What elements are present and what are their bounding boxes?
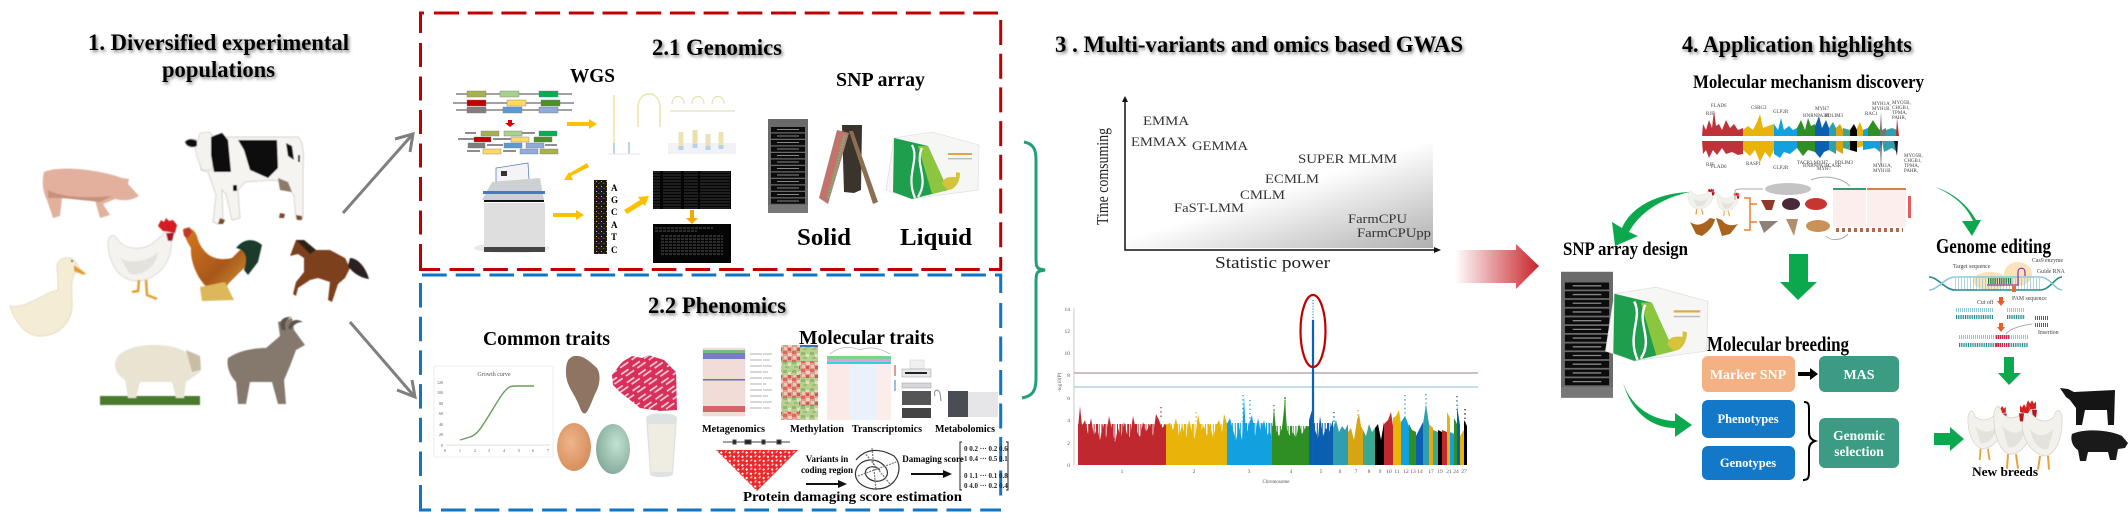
chart: growth curve: 80 [439,401,443,406]
gene model track [723,440,790,444]
matrix: damaging scores: 0 1.1 ··· 0.1 0.8 [964,472,1008,480]
axis title: Chromosome [1263,480,1290,485]
image strip: base calling: G [611,195,618,205]
icon: chicken breast [566,356,600,413]
icon: solid SNP chip rack [768,119,808,213]
box: genotypes: Genotypes [1720,456,1776,470]
label: variants in coding region [801,454,853,488]
method labels: FarmCPU [1348,211,1408,226]
heatmap: tissue expression [1833,188,1911,230]
box: MAS [1819,356,1899,392]
heatmap: methylation [781,345,818,420]
brace: inputs to genomic selection [1803,402,1815,480]
image strip: base calling: A [611,220,618,230]
threshold lines [1074,372,1478,374]
labels: Target sequence [1953,264,1991,270]
chromosome labels: 3 [1248,469,1251,475]
heading: molecular breeding: Molecular breeding [1707,332,1849,356]
arrow: images to reads [624,196,649,214]
label: damaging score: Damaging score [902,454,964,464]
heading: 2.1 genomics: 2.1 Genomics [652,35,782,60]
chromosome labels: 5 [1320,469,1323,475]
gene labels: CHGB1, [1892,106,1910,111]
heading: 2.2 phenomics: 2.2 Phenomics [648,293,786,318]
arrow: SNP design to breeding [1623,382,1692,437]
chart: mirrored manhattan plot [1702,101,1923,174]
arrow: populations to genomics [343,134,413,213]
y axis: 8 [1067,373,1070,379]
method labels: ECMLM [1265,171,1319,186]
box: phenotypes [1702,400,1795,438]
chromosome skylines [1078,396,1467,465]
icon: green egg [596,424,630,474]
heading: diversified experimental populations: populations [162,57,275,82]
gene labels: MYH1A, [1873,164,1892,169]
matrix: damaging scores: 1 0.4 ··· 0.5 0.1 [964,455,1008,463]
method labels: CMLM [1240,187,1285,202]
chromosome labels: 9 [1379,469,1382,475]
arrow: reads to variants [686,210,698,224]
arrow: populations to phenomics [350,322,415,397]
chromosome labels: 21 [1446,469,1452,475]
heading: common traits: Common traits [483,328,610,350]
y axis: 0 [1067,463,1070,469]
box: MAS: MAS [1843,368,1875,383]
icon: LC-MS instruments [902,360,998,418]
chart: growth curve: 4 [503,448,505,453]
chromosome labels: 4 [1290,469,1293,475]
chromosome labels: 6 [1339,469,1342,475]
labels [1953,258,2066,336]
gene labels [1706,101,1923,174]
arrow: GWAS to applications [1455,244,1539,289]
gene labels: RASP1 [1746,162,1762,167]
chromosome labels: 14 [1417,469,1423,475]
arrow: amplification to sequencer [564,163,589,180]
arrow: discovery to molecular breeding [1780,254,1817,300]
icon: SNP chip [1561,272,1613,398]
icon: sheep [100,345,201,405]
skyline fine texture [1078,431,1333,434]
chart: growth curve: 7 [547,448,549,453]
tissues top row [1761,198,1827,210]
icon: white hen [108,218,177,299]
heading: application highlights: 4. Application highlights [1682,32,1912,57]
gene labels: PDLIM3 [1835,161,1854,166]
icon: white chickens [1688,188,1739,216]
gene labels: MYH1A, [1872,102,1891,107]
box: genomic selection [1819,418,1899,468]
arrow: discovery to genome editing [1935,187,1981,236]
panel: tissue omics schematic [1688,177,1911,240]
chart: growth curve: 60 [439,411,443,416]
panel: sequence reads terminal [653,171,731,209]
heading: multi-variants and omics based GWAS: 3 . Multi-variants and omics based GWAS [1055,32,1463,57]
chromosome labels: 19 [1437,469,1443,475]
method labels [1131,113,1431,240]
arrow: sequencer to images [553,210,584,220]
chromosome labels: 8 [1368,469,1371,475]
heading: SNP array: SNP array [836,69,925,91]
labels: omics types [702,424,995,435]
gene labels: RAC1 [1865,112,1878,117]
bubble: tissues [1765,183,1811,195]
icon: milk glass [646,414,677,477]
chart: growth curve: 3 [488,448,490,453]
icon: brown chickens [1690,218,1738,236]
matrix: damaging scores [960,442,1008,490]
heading: diversified experimental populations [88,30,349,82]
y axis: 12 [1064,329,1070,335]
matrix: damaging scores: 0 0.2 ··· 0.2 0.6 [964,445,1008,453]
gene labels: HNRNPA3B [1803,164,1830,169]
heatmap: transcriptomics [827,347,895,420]
method labels: GEMMA [1192,138,1249,153]
chromosome labels [1121,469,1467,475]
image strip: base calling: T [611,232,617,242]
gene labels: RJF [1706,112,1714,117]
chart: growth curve: 2 [474,448,476,453]
chromosome labels: 17 [1428,469,1434,475]
image strip: base calling: C [611,245,618,255]
panel: variant table terminal [653,224,731,263]
red step arrows [1997,297,2005,332]
labels: Guide RNA [2037,269,2066,275]
chart: method time vs power [1093,96,1441,272]
highlight ellipse [1300,295,1326,367]
chromosome labels: 10 [1386,469,1392,475]
arrow: breeding to new breeds [1934,427,1964,451]
labels: Cas9 enzyme [2032,258,2063,264]
icon: cow [185,132,303,224]
brace: omics to GWAS [1022,142,1045,398]
label: variants in coding region: Variants in [806,454,848,464]
labels: Insertion [2038,330,2059,336]
gene labels: MYH1B [1873,169,1891,174]
label: variants in coding region: coding region [801,465,853,475]
label: protein damaging score estimation: Protein damaging score estimation [743,489,963,504]
chromosome labels: 1 [1121,469,1124,475]
panel: genomics dashed box [420,13,1001,270]
heading: WGS: WGS [570,65,615,87]
gene labels: HNRNPA3B [1803,114,1830,119]
gene labels: MYO5B, [1904,154,1923,159]
icon: horse [290,240,369,302]
method labels: SUPER MLMM [1298,151,1398,166]
main association peak [1312,300,1314,465]
arrow: discovery to SNP array design [1612,192,1690,246]
bracket: tissues [1744,198,1757,230]
icon: liquid SNP kit [886,132,979,199]
method labels: FaST-LMM [1174,200,1244,215]
chart: growth curve: 0 [444,448,446,453]
box: genomic selection: Genomic [1833,428,1885,443]
label: new breeds: New breeds [1972,464,2038,479]
y axis: 2 [1067,441,1070,447]
heading: molecular traits: Molecular traits [799,327,934,349]
axis label: statistic power: Statistic power [1215,253,1330,272]
label: damaging score [902,454,964,478]
chart: growth curve: 0 [441,443,443,448]
labels: omics types: Metabolomics [935,424,995,435]
diagram: CRISPR genome editing [1929,258,2066,345]
icon: pig [43,169,139,218]
chromosome labels: 11 [1394,469,1400,475]
glow [1973,262,2032,290]
box: genotypes [1702,446,1795,480]
box: genomic selection: selection [1834,444,1884,459]
gene labels: TPMA, [1904,164,1919,169]
arrow: marker to MAS [1798,368,1818,380]
heading: SNP array design: SNP array design [1563,239,1688,260]
icon: brown egg [557,423,591,471]
gene labels: FLAD6 [1711,165,1727,170]
axes [1125,100,1436,250]
panel: animals [10,132,369,405]
gene labels: CSRG3 [1751,106,1767,111]
gene labels: MYH7 [1815,107,1830,112]
chart: LD triangle [716,450,798,491]
icon: beef [612,355,677,411]
scattered points [1161,394,1465,430]
connector to tissues [1735,189,1763,200]
flow curve [1811,177,1850,240]
y axis [1058,307,1074,469]
labels: PAM sequence [2012,296,2047,302]
labels: omics types: Metagenomics [702,424,765,435]
chart: growth curve: 120 [437,380,443,385]
chart: manhattan plot [1058,295,1478,485]
chart: growth curve: 100 [437,390,443,395]
heading: genome editing: Genome editing [1936,234,2051,258]
y axis: 6 [1067,396,1070,402]
labels: Cut off [1977,299,1994,306]
diagram: DNA fragment library [453,91,574,154]
gene labels: PAHR, [1904,169,1918,174]
icon: SNP kit [1606,287,1708,361]
label: liquid: Liquid [900,225,973,251]
gene labels: GLP2R [1773,166,1789,171]
box: marker SNP: Marker SNP [1710,368,1787,383]
label: solid: Solid [797,225,852,251]
heatmap: metagenomics [703,348,772,416]
arrow: editing to new breeds [1998,357,2021,385]
y axis: -log10(P) [1058,372,1063,392]
labels: omics types: Methylation [790,424,844,435]
icon: black cow [2060,388,2115,425]
heading: molecular mechanism discovery: Molecular mechanism discovery [1693,72,1924,93]
gene labels: MYH1B, [1872,107,1891,112]
icon: sequencer [474,163,550,253]
icon: white hens new breeds [1968,400,2062,470]
labels: omics types: Transcriptomics [852,424,922,435]
icon: goat [227,317,305,404]
chart: growth curve [434,366,553,457]
gene labels: TPMA, [1892,111,1907,116]
gene labels: RJF [1706,163,1714,168]
method labels: EMMA [1143,113,1190,128]
gene labels: PAHR, [1892,116,1906,121]
diagram: bridge amplification [608,94,736,154]
panel: phenomics dashed box [420,275,1001,510]
box: phenotypes: Phenotypes [1717,412,1779,426]
method labels: FarmCPUpp [1357,225,1431,240]
chart: growth curve: Growth curve [477,372,511,378]
axis label: time consuming: Time comsuming [1093,128,1112,225]
chart: growth curve: 6 [532,448,534,453]
icon: duck [10,258,86,336]
icon: black pig [2071,430,2128,461]
box: marker SNP [1702,356,1795,392]
DNA strands [1929,277,2062,290]
chart: growth curve: 20 [439,432,443,437]
icon: protein structure [855,448,899,490]
image strip: base calling [594,180,618,255]
method labels: EMMAX [1131,134,1188,149]
gene labels: MYH7 [1817,167,1832,172]
chromosome labels: 13 [1410,469,1416,475]
chromosome labels: 27 [1461,469,1467,475]
gene labels: CHGB1, [1904,159,1922,164]
gene labels: GLP2R [1773,110,1789,115]
gene labels: CASR [1828,164,1842,169]
icon: rooster [183,227,262,301]
y axis: 4 [1067,418,1070,424]
gene labels: MYO5B, [1892,101,1911,106]
heading: diversified experimental populations: 1. Diversified experimental [88,30,349,55]
image strip: base calling: A [611,183,618,193]
cut fragments [1956,310,2048,345]
matrix: damaging scores: 0 4.0 ··· 0.2 0.4 [964,482,1008,490]
chart: growth curve: 5 [518,448,520,453]
image strip: base calling: C [611,207,618,217]
arrow: library to amplification [567,119,597,129]
gene labels: TACR3,MYH7 [1797,161,1828,166]
tissues bottom row [1759,219,1830,236]
gene labels: FLAD6 [1711,104,1727,109]
chart: growth curve: 40 [439,422,443,427]
chart: growth curve: 1 [459,448,461,453]
chromosome labels: 12 [1403,469,1409,475]
y axis: 10 [1064,351,1070,357]
chromosome labels: 2 [1193,469,1196,475]
chromosome labels: 7 [1355,469,1358,475]
y axis: 14 [1064,307,1070,313]
chromosome labels: 24 [1453,469,1459,475]
gene labels: PDLIM3 [1825,114,1844,119]
icon: SNP slide [819,125,878,204]
